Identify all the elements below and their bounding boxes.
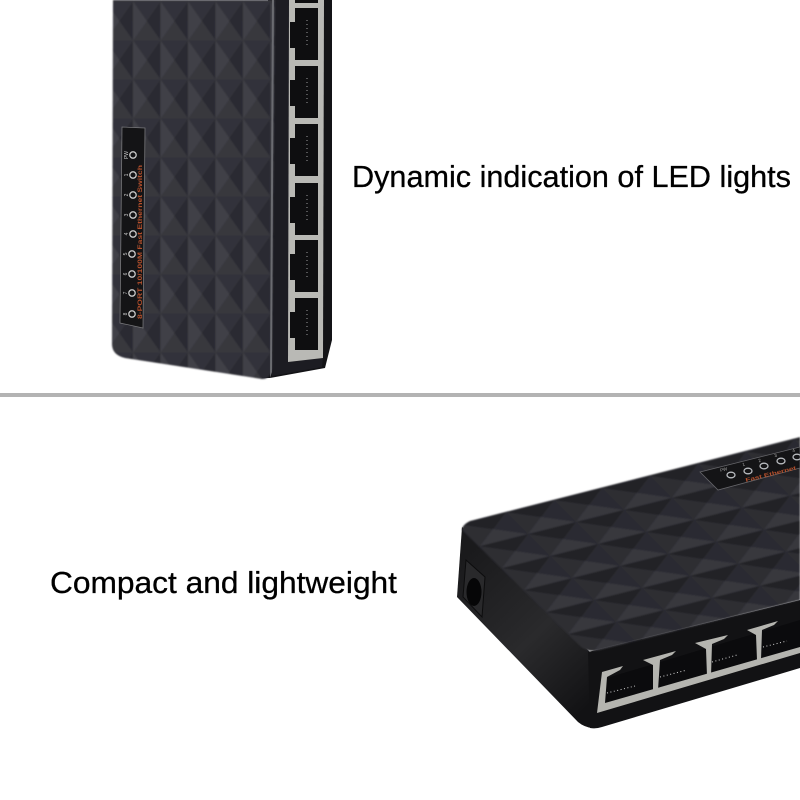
heading: LED lights: Dynamic indication of LED lights [352,159,791,194]
switch top face with diamond pattern [112,0,275,379]
LED labels [720,448,796,473]
LED labels: 4 [124,232,130,235]
LED indicators [129,152,136,317]
port 5 [290,240,318,292]
port 6 [290,298,318,350]
switch front face [588,600,800,728]
LED labels: 4 [792,448,796,453]
port 4 [290,183,318,235]
switch photo: vertical top view [112,0,332,379]
port 3 [290,124,318,176]
LED labels: 3 [124,213,130,216]
LED labels: 2 [124,193,130,196]
panel caption: 8-PORT 10/100M Fast Ethernet Switch [138,165,144,319]
side strip beside ports [272,0,323,376]
LED labels: 1 [742,462,746,467]
silver port frame [597,647,800,713]
heading: compact: Compact and lightweight [50,565,397,600]
port 2 [290,66,318,118]
LED labels: 5 [123,252,129,255]
LED panel [120,127,145,328]
port divider 1 [643,651,676,690]
divider [0,393,800,397]
port pin dots [607,641,787,693]
port divider 3 [747,621,778,660]
port 1 [290,8,318,60]
power socket [463,560,485,617]
ethernet port block [597,620,800,713]
switch left side face [457,527,592,728]
switch photo: angled view [457,437,800,728]
ethernet port block [288,0,324,362]
LED labels: PW [124,151,130,159]
LED labels: 3 [774,453,778,458]
LED labels: 2 [758,458,762,463]
switch top face with diamond pattern [462,437,800,651]
LED panel [700,447,800,490]
LED indicators [727,454,800,478]
port pin dots [306,20,308,338]
LED labels: 8 [123,312,129,315]
LED labels: PW [720,466,728,473]
port interiors [605,620,800,703]
LED labels: 6 [123,272,129,275]
panel caption: Fast Ethernet [745,465,797,484]
edge highlight [270,0,274,378]
switch side face [262,0,332,378]
LED labels: 7 [123,291,129,294]
LED labels [123,151,130,315]
port divider 2 [695,635,728,676]
LED labels: 1 [124,173,130,176]
